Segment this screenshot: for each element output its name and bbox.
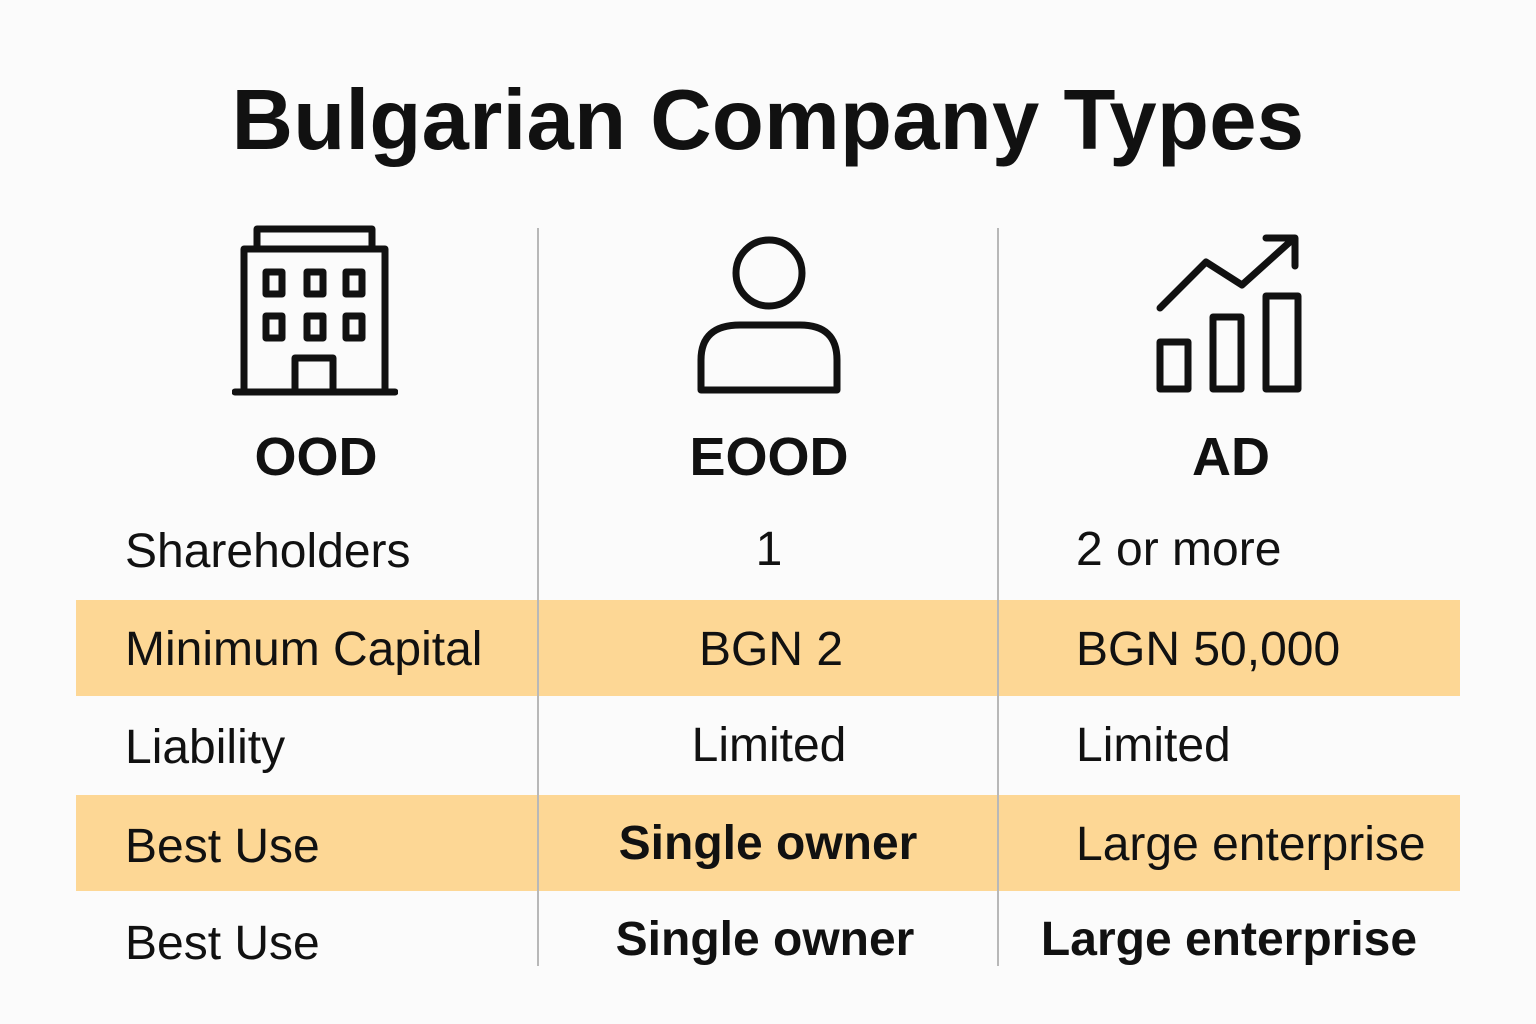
heading: AD: AD xyxy=(1192,427,1270,487)
icon: person xyxy=(698,236,840,394)
row: best use (highlighted): Single owner xyxy=(619,817,917,870)
row: best use (highlighted): Best Use xyxy=(125,820,320,873)
highlight band: minimum capital row xyxy=(76,600,1460,696)
row: liability: Limited xyxy=(1076,719,1231,772)
row: best use (repeat): Single owner xyxy=(616,913,914,966)
title: Bulgarian Company Types xyxy=(232,73,1304,168)
row: best use (highlighted) xyxy=(125,817,1426,873)
row: shareholders: 2 or more xyxy=(1076,523,1281,576)
icon: growth chart xyxy=(1156,234,1302,392)
row: best use (highlighted): Large enterprise xyxy=(1076,818,1426,871)
row: liability: Limited xyxy=(692,719,846,772)
row: liability: Liability xyxy=(125,721,285,774)
row: best use (repeat) xyxy=(125,913,1417,970)
row: minimum capital: Minimum Capital xyxy=(125,623,482,676)
heading: EOOD: EOOD xyxy=(689,427,849,487)
heading: OOD: OOD xyxy=(254,427,378,487)
highlight band: best use row xyxy=(76,795,1460,891)
row: minimum capital: BGN 2 xyxy=(699,623,843,676)
row: best use (repeat): Large enterprise xyxy=(1041,913,1417,966)
row: shareholders xyxy=(125,523,1281,578)
row: minimum capital: BGN 50,000 xyxy=(1076,623,1340,676)
icon: building xyxy=(232,226,398,396)
row: shareholders: Shareholders xyxy=(125,525,411,578)
row: shareholders: 1 xyxy=(756,523,782,576)
row: liability xyxy=(125,719,1231,774)
row: minimum capital xyxy=(125,623,1340,676)
row: best use (repeat): Best Use xyxy=(125,917,320,970)
